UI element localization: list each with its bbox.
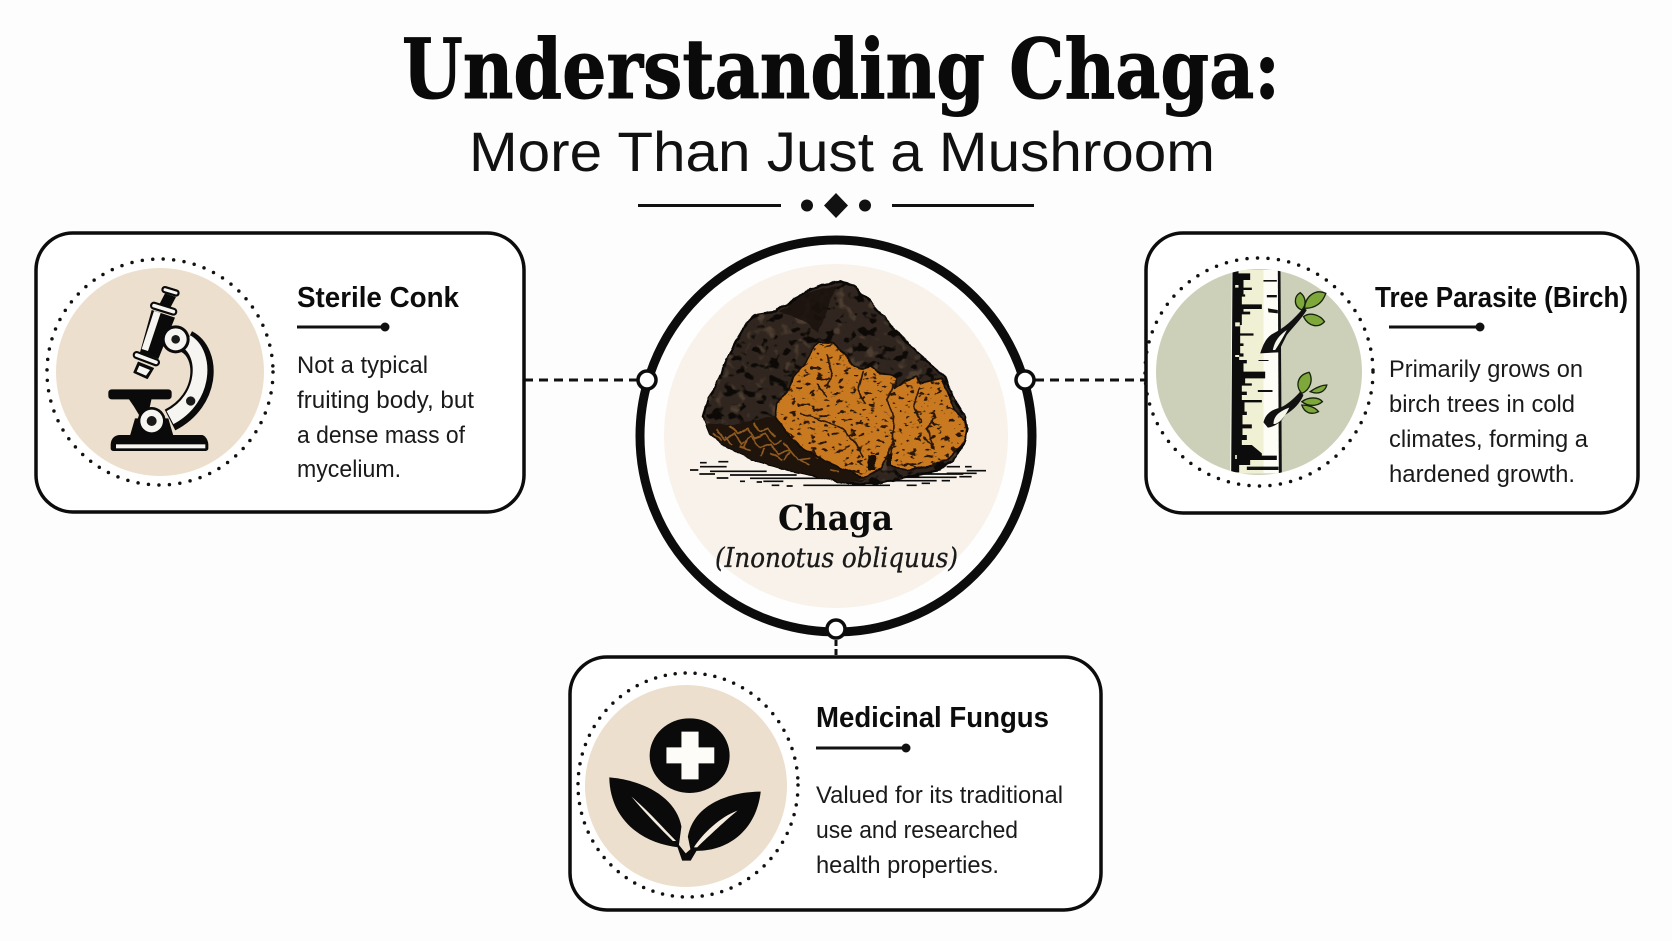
leaves bbox=[1295, 292, 1327, 413]
dotted ring bbox=[578, 673, 798, 897]
lower branch bbox=[1263, 392, 1303, 428]
title: Understanding Chaga: bbox=[402, 22, 1280, 118]
hub node: left bbox=[638, 371, 656, 389]
card body text bbox=[1389, 356, 1589, 488]
dotted ring bbox=[47, 259, 273, 485]
hub name: Chaga bbox=[778, 498, 893, 539]
card frame bbox=[570, 657, 1101, 910]
heading rule bbox=[816, 744, 910, 752]
card body text bbox=[297, 352, 474, 483]
dashed connector: hub to right card bbox=[1035, 378, 1146, 382]
card frame bbox=[36, 233, 524, 512]
orange inner flesh bbox=[775, 343, 967, 477]
dark outer crust bbox=[703, 281, 967, 484]
card body text: a dense mass of bbox=[297, 422, 465, 449]
card heading: Sterile Conk bbox=[297, 282, 460, 314]
ground hatching bbox=[690, 462, 986, 486]
icon background disc bbox=[585, 685, 787, 887]
card body text: climates, forming a bbox=[1389, 426, 1589, 453]
card body text: Valued for its traditional bbox=[816, 782, 1063, 809]
hub latin name: (Inonotus obliquus) bbox=[715, 543, 958, 574]
hub node: bottom bbox=[827, 620, 845, 638]
hub cream disc bbox=[664, 264, 1008, 608]
card frame bbox=[1146, 233, 1638, 513]
subtitle: More Than Just a Mushroom bbox=[469, 120, 1215, 183]
card heading: Tree Parasite (Birch) bbox=[1375, 282, 1628, 314]
icon: microscope bbox=[108, 290, 208, 451]
flesh flecks bbox=[773, 340, 970, 480]
panel: sterile conk bbox=[36, 233, 524, 512]
upper branch bbox=[1260, 308, 1307, 353]
card body text: fruiting body, but bbox=[297, 387, 474, 414]
heading rule bbox=[297, 322, 390, 332]
icon: medical cross with leaves bbox=[609, 718, 761, 861]
icon background disc bbox=[56, 268, 264, 476]
panel: tree parasite bbox=[1145, 233, 1638, 513]
card body text: birch trees in cold bbox=[1389, 391, 1575, 418]
dashed connector: left card to hub bbox=[524, 378, 637, 382]
dashed connector: hub to bottom card bbox=[834, 640, 838, 658]
flesh fissures bbox=[800, 353, 937, 470]
hub node: right bbox=[1016, 371, 1034, 389]
panel: central chaga hub bbox=[638, 240, 1034, 638]
panel: medicinal fungus bbox=[570, 657, 1101, 910]
card body text: hardened growth. bbox=[1389, 461, 1575, 488]
crust texture bbox=[700, 277, 970, 487]
card heading: Medicinal Fungus bbox=[816, 702, 1049, 734]
lower brown underside bbox=[707, 417, 863, 483]
card body text: health properties. bbox=[816, 852, 999, 879]
card body text: Not a typical bbox=[297, 352, 428, 379]
heading rule bbox=[1389, 322, 1484, 332]
dotted ring bbox=[1145, 258, 1373, 486]
card body text: mycelium. bbox=[297, 456, 401, 483]
card body text: Primarily grows on bbox=[1389, 356, 1583, 383]
icon: birch trunk with leaves bbox=[1156, 269, 1362, 475]
card body text: use and researched bbox=[816, 817, 1018, 844]
card body text bbox=[816, 782, 1063, 879]
hub outer ring bbox=[640, 240, 1032, 632]
title divider ornament bbox=[638, 193, 1034, 218]
illustration: chaga chunk bbox=[690, 277, 986, 487]
